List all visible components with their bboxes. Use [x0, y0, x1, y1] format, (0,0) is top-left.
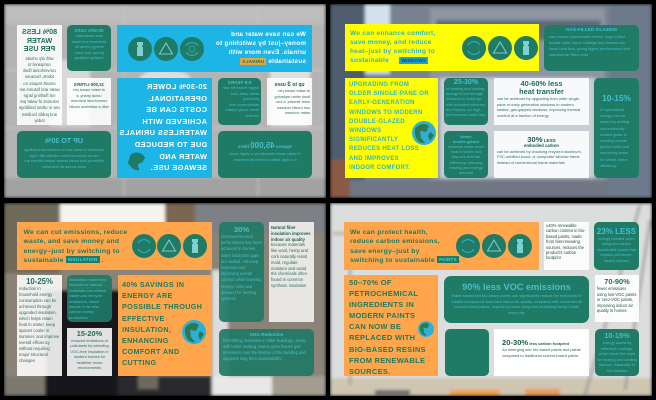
key message text: INSULATION,	[122, 325, 171, 334]
callout: 23% less	[594, 222, 639, 270]
callout: 45,000 liters	[218, 131, 312, 178]
stat subheading: embodied carbon	[524, 143, 559, 148]
key message text: MODERN PAINTS	[349, 311, 415, 320]
stat heading: Approx 45,000 liters	[238, 141, 292, 150]
key message text: OLDER SINGLE-PANE OR	[349, 91, 429, 97]
header text: sustainable	[350, 57, 389, 64]
stat heading: 90% less VOC emissions	[462, 282, 571, 292]
key message text: AND IMPROVES	[349, 156, 399, 162]
header text: INSULATION	[68, 257, 98, 262]
key message text: WATER AND	[159, 152, 207, 161]
stat body: can be achieved by choosing recycled aluminum, FSC-certified wood, or composite window frame instead of conventional frame materials	[497, 149, 582, 165]
key message text: DOUBLE-GLAZED	[349, 119, 405, 125]
icon: recycle triangle	[482, 234, 506, 258]
stat heading: 10-25%	[26, 277, 53, 286]
stat heading	[453, 134, 479, 144]
key message text	[349, 278, 426, 376]
callout: gas-filled glazing	[544, 25, 639, 71]
header text: save energy–just by	[350, 248, 420, 255]
callout: natural fiber insulation	[269, 222, 314, 322]
header text: waste, and save money and	[24, 238, 119, 245]
header text: We can enhance comfort,	[350, 30, 436, 36]
key message text: WINDOWS	[349, 128, 381, 134]
key message text: REDUCES HEAT LOSS	[349, 146, 419, 152]
header text: We can protect health,	[350, 229, 428, 236]
callout: 12,000 liters	[67, 78, 111, 125]
callout: 25-30%	[444, 78, 488, 125]
header: windows	[345, 24, 539, 71]
icon: globe	[418, 321, 434, 337]
callout: 70-90%	[595, 275, 639, 322]
icon: recycle triangle	[488, 36, 512, 60]
icon: bottle	[128, 37, 152, 61]
key message text: WATERLESS URINALS	[119, 128, 207, 137]
key message text: SEWAGE USE.	[150, 163, 207, 172]
header text	[350, 30, 436, 64]
stat heading: UP TO 30%	[45, 136, 83, 145]
icon: refresh cycle	[462, 36, 486, 60]
key message text: SIGNIFICANTLY	[349, 137, 398, 143]
panel: key message	[345, 78, 438, 178]
key message text: 20-30% LOWER	[147, 82, 207, 91]
stat body: of heating and cooling energy is lost through windows in buildings with outdated windows and frames, so high-performance units help	[446, 86, 486, 117]
callout: up to 30%	[17, 131, 111, 178]
header text: WINDOWS	[401, 58, 426, 63]
stat heading: 12,000 LITERS	[74, 82, 104, 87]
callout: dry urinal savings	[67, 25, 111, 71]
key message text: COSTS CAN BE	[146, 105, 207, 114]
icon: recycle triangle	[154, 37, 178, 61]
panel: paints	[344, 222, 639, 376]
panel: windows	[345, 24, 639, 178]
stat heading: PER USE	[24, 44, 55, 53]
stat heading: 15-20%	[77, 329, 102, 338]
callout: 40-60% less heat transfer	[494, 78, 589, 125]
key message text: CUTTING	[122, 358, 156, 367]
stat heading: 10-15%	[604, 331, 630, 340]
key message text: UPGRADING FROM	[349, 82, 409, 88]
stat body: of water saved annually by a single urinal in a high-traffic commercial restroom	[229, 151, 301, 162]
key message text: COMFORT AND	[122, 347, 179, 356]
stat body: fewer emissions using low-VOC paints or zero-VOC paints, improving indoor air quality in homes	[597, 286, 636, 313]
key message text: PETROCHEMICAL	[349, 289, 418, 298]
header text	[216, 30, 306, 65]
stat body: Insulation made from recycled or natural materials can reduce waste and lifecycle emissions, which results in far less carbon during production	[69, 277, 106, 320]
header text: URINALS	[242, 59, 264, 64]
header text: urinals. Even more with	[228, 49, 306, 56]
key message text: EFFECTIVE	[122, 314, 165, 323]
header text	[24, 229, 127, 264]
header text: sustainable	[268, 58, 306, 65]
callout: emissions reduction	[219, 329, 314, 376]
stat heading	[519, 79, 564, 96]
header text: sustainable .	[24, 257, 104, 264]
key message text: WINDOWS TO MODERN	[349, 110, 423, 116]
stat heading: 23% LESS	[597, 227, 636, 236]
header text: We can cut emissions, reduce	[24, 229, 127, 236]
callout: 5-8 years	[218, 78, 261, 125]
stat heading	[22, 27, 57, 53]
stat body: energy saved by reflective coatings, which lower the need for heating and cooling indoors, especially in hot climates	[597, 340, 637, 372]
key message text: ACHIEVED WITH	[142, 117, 207, 126]
key message text: 50–70% OF	[349, 278, 392, 287]
stat heading: Natural fiber insulation improves indoor air quality	[271, 225, 311, 242]
header text: PAINTS	[439, 257, 457, 262]
stat body: can be achieved by upgrading from older single-pane or early generation windows to modern sealed, gas-gapped windows, improving thermal comfort at a fraction of energy	[497, 96, 580, 118]
icon: bottle	[508, 234, 532, 258]
key message text	[349, 82, 429, 171]
stat heading: 30% LESS	[527, 135, 556, 144]
callout: 10-25%	[17, 275, 62, 376]
stat body: Water-based and bio-based paints can significantly reduce the emissions of volatile compounds that harm indoor air quality, compared with conventional solvent-based paints, improving indoor living and protecting family health every day	[451, 293, 582, 314]
stat heading: 5-8 YEARS	[228, 80, 251, 85]
header: insulation	[17, 222, 212, 270]
callout: bio-based carbon content	[544, 222, 589, 270]
panel: key message	[118, 275, 212, 376]
stat body: energy needed when using low-carbon sustainable paints that replace petroleum-based options	[597, 236, 636, 263]
panel: key message	[117, 78, 212, 178]
header: urinals	[117, 25, 312, 72]
stat body: An emerging win: bio-based paints and paints compared to traditional solvent-based paints	[502, 347, 581, 358]
key message text: INGREDIENTS IN	[349, 300, 414, 309]
stat body: longer fixture life with fewer parts, less plumbing maintenance and fewer costly repairs needed	[222, 85, 259, 118]
header text: switching to sustainable .	[350, 257, 461, 264]
stat heading: heat transfer	[519, 87, 564, 96]
header text: heat–just by switching to	[350, 48, 435, 55]
stat heading: 10-15%	[602, 93, 631, 103]
key message text	[122, 280, 202, 367]
callout: 10-15%	[594, 78, 639, 178]
callout: 10-15%	[595, 329, 639, 376]
header text: money–just by switching to	[216, 40, 306, 47]
header text	[350, 229, 461, 264]
header text: We can save water and	[231, 30, 306, 38]
panel: empty green card	[445, 329, 489, 376]
stat heading: up to 3 uses	[274, 81, 305, 88]
stat heading: double glazed	[453, 139, 479, 144]
icon: bottle	[183, 234, 207, 258]
key message text: ENHANCING	[122, 336, 169, 345]
header text: save money, and reduce	[350, 39, 432, 46]
stat body: windows retain more heat in winter and improve thermal efficiency, reducing heating and energy demand	[448, 144, 484, 175]
callout: insulation materials	[67, 275, 112, 322]
stat heading: 40-60% less	[521, 79, 562, 88]
stat heading: Newer	[460, 134, 472, 139]
header: paints	[344, 222, 539, 270]
header text: energy–just by switching to	[24, 248, 120, 255]
stat body: improved thermal performance has been achieved in homes when insulation gaps are sealed, reducing heat loss and improving overall comfort while lowering energy costs and demand for heating systems	[221, 234, 262, 301]
stat heading: 20-30% less carbon footprint	[502, 338, 569, 347]
key message text: INDOOR COMFORT.	[349, 165, 410, 171]
stat heading: GAS-FILLED GLAZING	[566, 28, 617, 33]
stat heading: 30%	[234, 225, 249, 234]
icon: globe	[412, 121, 436, 145]
key message text: DUE TO REDUCED	[134, 140, 207, 149]
key message text: BIO-BASED RESINS	[349, 345, 426, 354]
stat heading: 80% LESS	[22, 27, 57, 36]
stat heading: 30-50% LESS	[74, 28, 104, 33]
callout: 20-30% less carbon footprint	[494, 329, 589, 376]
key message text: OPERATIONAL	[149, 94, 207, 103]
icon: globe	[128, 152, 146, 170]
stat body: can reduce heat transfer further. Argon-filled double units, low-e coatings and frames can lower heat flow, giving higher performance over standard air-filled units	[549, 34, 631, 57]
callout: 15-20%	[67, 328, 112, 376]
stat body: because materials like wool, hemp and cork naturally resist mold, regulate moisture and avoid the chemicals often found in common synthetic insulation	[271, 242, 308, 288]
stat heading: 70-90%	[604, 277, 630, 286]
icon: bottle	[514, 36, 538, 60]
icon: refresh cycle	[456, 234, 480, 258]
stat body: of water saved per flush when replacing older fixtures, a low-use model reduces water volumes	[275, 88, 310, 115]
key message text: FROM RENEWABLE	[349, 356, 425, 365]
icon: recycle triangle	[157, 234, 181, 258]
stat body: reduction in household energy consumption can be achieved through upgraded insulation, which helps retain heat in winter, keep spaces cooler in summer, and improve overall efficiency without requiring major structural changes	[19, 286, 59, 363]
icon: refresh cycle	[132, 234, 156, 258]
icon: globe	[182, 320, 206, 344]
panel: urinals (mirrored)	[17, 25, 312, 178]
callout: up to 3 uses	[267, 78, 312, 125]
key message text: CAN NOW BE	[349, 322, 401, 331]
panel: key message	[344, 275, 438, 376]
key message text: ENERGY ARE	[122, 291, 173, 300]
stat body: with dry urinals compared to conventional flush toilets, because urinals require no water and fixtures are not flushing large volumes of water per use in urban buildings and public facilities today	[19, 56, 60, 123]
callout: 30% less embodied carbon	[494, 131, 589, 178]
key message text: POSSIBLE THROUGH	[122, 302, 202, 311]
panel: insulation	[17, 222, 314, 376]
stat body: Retrofitting insulation in older buildings, along with better sealing, lowers greenhouse gas emissions over the lifetime of the building and supports long term sustainability	[223, 338, 306, 361]
callout: 30%	[219, 222, 264, 322]
icon: refresh cycle	[180, 37, 204, 61]
stat body: of operational energy can be saved by adding low-emissivity coated glass to existing double glazed units and improving seals for whole-home efficiency	[600, 107, 629, 168]
stat heading: 25-30%	[454, 79, 478, 86]
stat heading: GHG Reduction	[249, 332, 284, 337]
stat heading: WATER	[27, 36, 52, 45]
key message text: REPLACED WITH	[349, 333, 415, 342]
key message text	[119, 82, 207, 172]
key message text: 40% SAVINGS IN	[122, 280, 184, 289]
stat body: reduced emissions of pollutants by selecting VOC-free insulation in modern homes for healthier home environments	[70, 338, 109, 370]
key message text: SOURCES.	[349, 367, 391, 376]
callout: 90% less VOC emissions	[444, 276, 589, 323]
stat body: of water saved per urinal yearly, a commercial restroom with a waterless model	[69, 87, 109, 109]
stat body: reduction in water use in commercial buildings can be achieved when retrofits with high-efficiency and smart sensor-based fixtures are used across all restrooms	[24, 147, 104, 169]
header text: reduce carbon emissions,	[350, 238, 440, 245]
key message text: EARLY-GENERATION	[349, 100, 415, 106]
callout: 80% less water	[17, 25, 62, 125]
stat body: less wastewater treatment and lower energy needs for pumps and water heating buildings	[72, 33, 106, 60]
callout: thermal upgrade	[444, 131, 488, 178]
stat body: ≥40% renewable carbon content in bio-based paints, made from fast-renewing sources, reduces the product's carbon footprint	[546, 223, 585, 260]
